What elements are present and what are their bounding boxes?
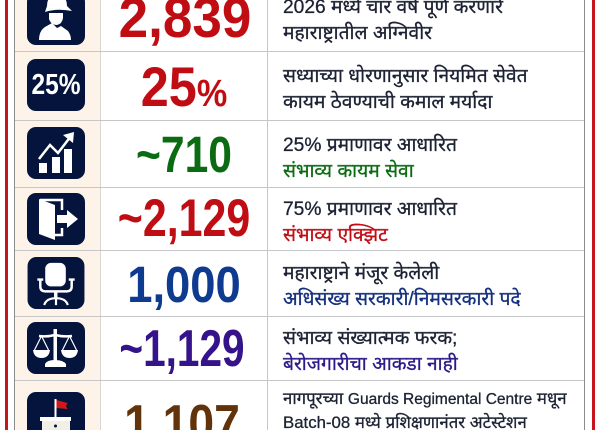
text: row 2: कायम ठेवण्याची कमाल मर्यादा: [283, 92, 492, 113]
outer frame right: [592, 0, 595, 430]
text: row 2: सध्याच्या धोरणानुसार नियमित सेवेत: [283, 66, 528, 87]
text: row 1: महाराष्ट्रातील अग्निवीर: [283, 23, 432, 44]
icon: regimental podium: [27, 392, 85, 430]
text: row 4: 75% प्रमाणावर आधारित: [283, 199, 457, 220]
text: row 6: बेरोजगारीचा आकडा नाही: [283, 354, 458, 375]
icon: balance scale: [27, 322, 85, 374]
text: row 3: संभाव्य कायम सेवा: [283, 161, 414, 182]
text: row 5: महाराष्ट्राने मंजूर केलेली: [283, 263, 439, 284]
text: row 7: नागपूरच्या Guards Regimental Centre मधून: [283, 389, 567, 408]
value: ~710: ~710: [136, 126, 232, 183]
value: ~2,129: ~2,129: [118, 189, 250, 248]
text: row 3: [282, 134, 458, 182]
text: row 4: संभाव्य एक्झिट: [283, 225, 388, 246]
text: row 5: अधिसंख्य सरकारी/निमसरकारी पदे: [283, 289, 521, 310]
text: row 7: [282, 389, 567, 430]
value: 25 percent: 25%: [141, 55, 227, 118]
value: 1,000: 1,000: [127, 256, 241, 313]
text: row 5: [282, 262, 521, 310]
icon column background: [15, 0, 100, 430]
icon: office chair: [28, 257, 84, 309]
icon: exit door: [27, 193, 85, 245]
value: ~1,129: ~1,129: [119, 320, 245, 378]
icon: 25 percent: [27, 59, 85, 111]
icon: soldier: [27, 0, 85, 45]
text: row 6: [282, 328, 458, 375]
text: row 3: 25% प्रमाणावर आधारित: [283, 135, 457, 156]
text: row 6: संभाव्य संख्यात्मक फरक;: [283, 328, 457, 349]
outer frame: [5, 0, 8, 430]
icon: growth chart: [27, 127, 85, 179]
text: row 1: [282, 0, 504, 44]
text: row 2: [282, 64, 528, 113]
text: row 4: [282, 198, 458, 246]
